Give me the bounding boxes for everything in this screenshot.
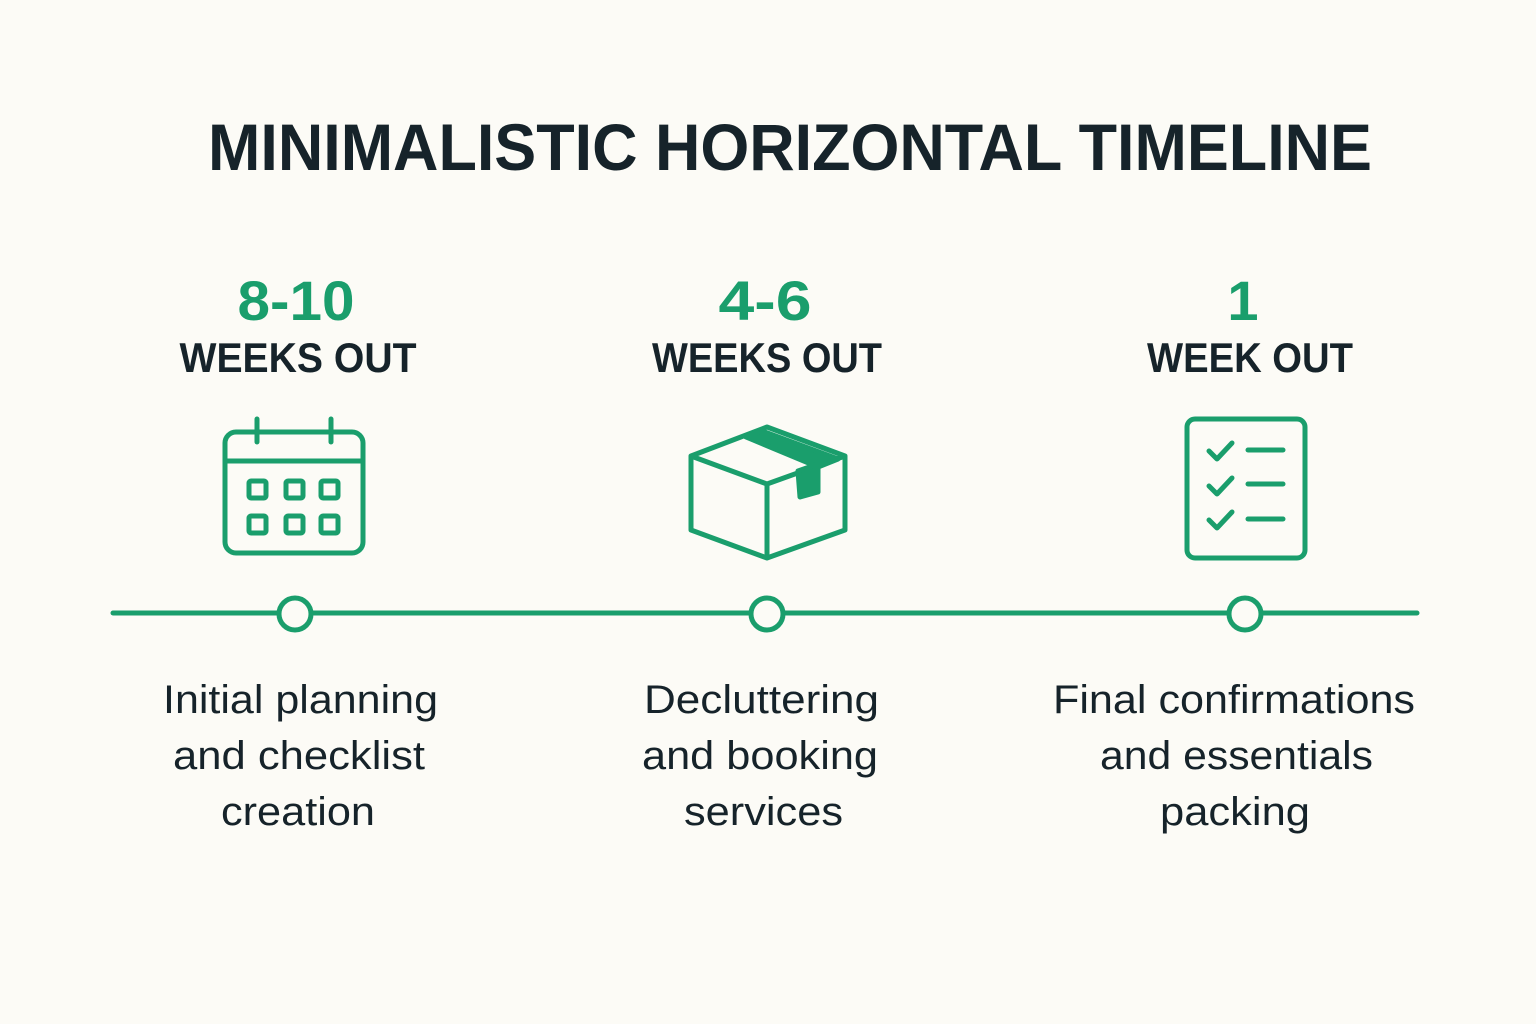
milestone 2 [642, 269, 882, 834]
icon: box [691, 427, 845, 558]
icon: checklist [1187, 419, 1305, 558]
label: 1 week out [1147, 269, 1353, 381]
label: 8-10 weeks out: WEEKS OUT [180, 334, 417, 381]
timeline line [113, 598, 1417, 630]
label: 4-6 weeks out: 4-6 [718, 269, 812, 332]
description 2 [642, 678, 879, 834]
description 1: creation [221, 790, 375, 834]
label: 1 week out: 1 [1227, 269, 1259, 332]
label: 4-6 weeks out: WEEKS OUT [652, 334, 882, 381]
label: 4-6 weeks out [652, 269, 882, 381]
milestone 3 [1053, 269, 1415, 834]
milestone 1 [163, 269, 438, 834]
icon: calendar [225, 419, 363, 553]
description 2: and booking [642, 734, 878, 778]
label: 1 week out: WEEK OUT [1147, 334, 1353, 381]
description 3: Final confirmations [1053, 678, 1415, 722]
description 3: and essentials [1100, 734, 1373, 778]
title: MINIMALISTIC HORIZONTAL TIMELINE [208, 110, 1372, 184]
description 2: services [684, 790, 843, 834]
description 3 [1053, 678, 1415, 834]
description 2: Decluttering [644, 678, 879, 722]
label: 8-10 weeks out [180, 269, 417, 381]
description 1: and checklist [173, 734, 425, 778]
label: 8-10 weeks out: 8-10 [238, 269, 354, 332]
description 1 [163, 678, 438, 834]
description 3: packing [1160, 790, 1310, 834]
description 1: Initial planning [163, 678, 438, 722]
